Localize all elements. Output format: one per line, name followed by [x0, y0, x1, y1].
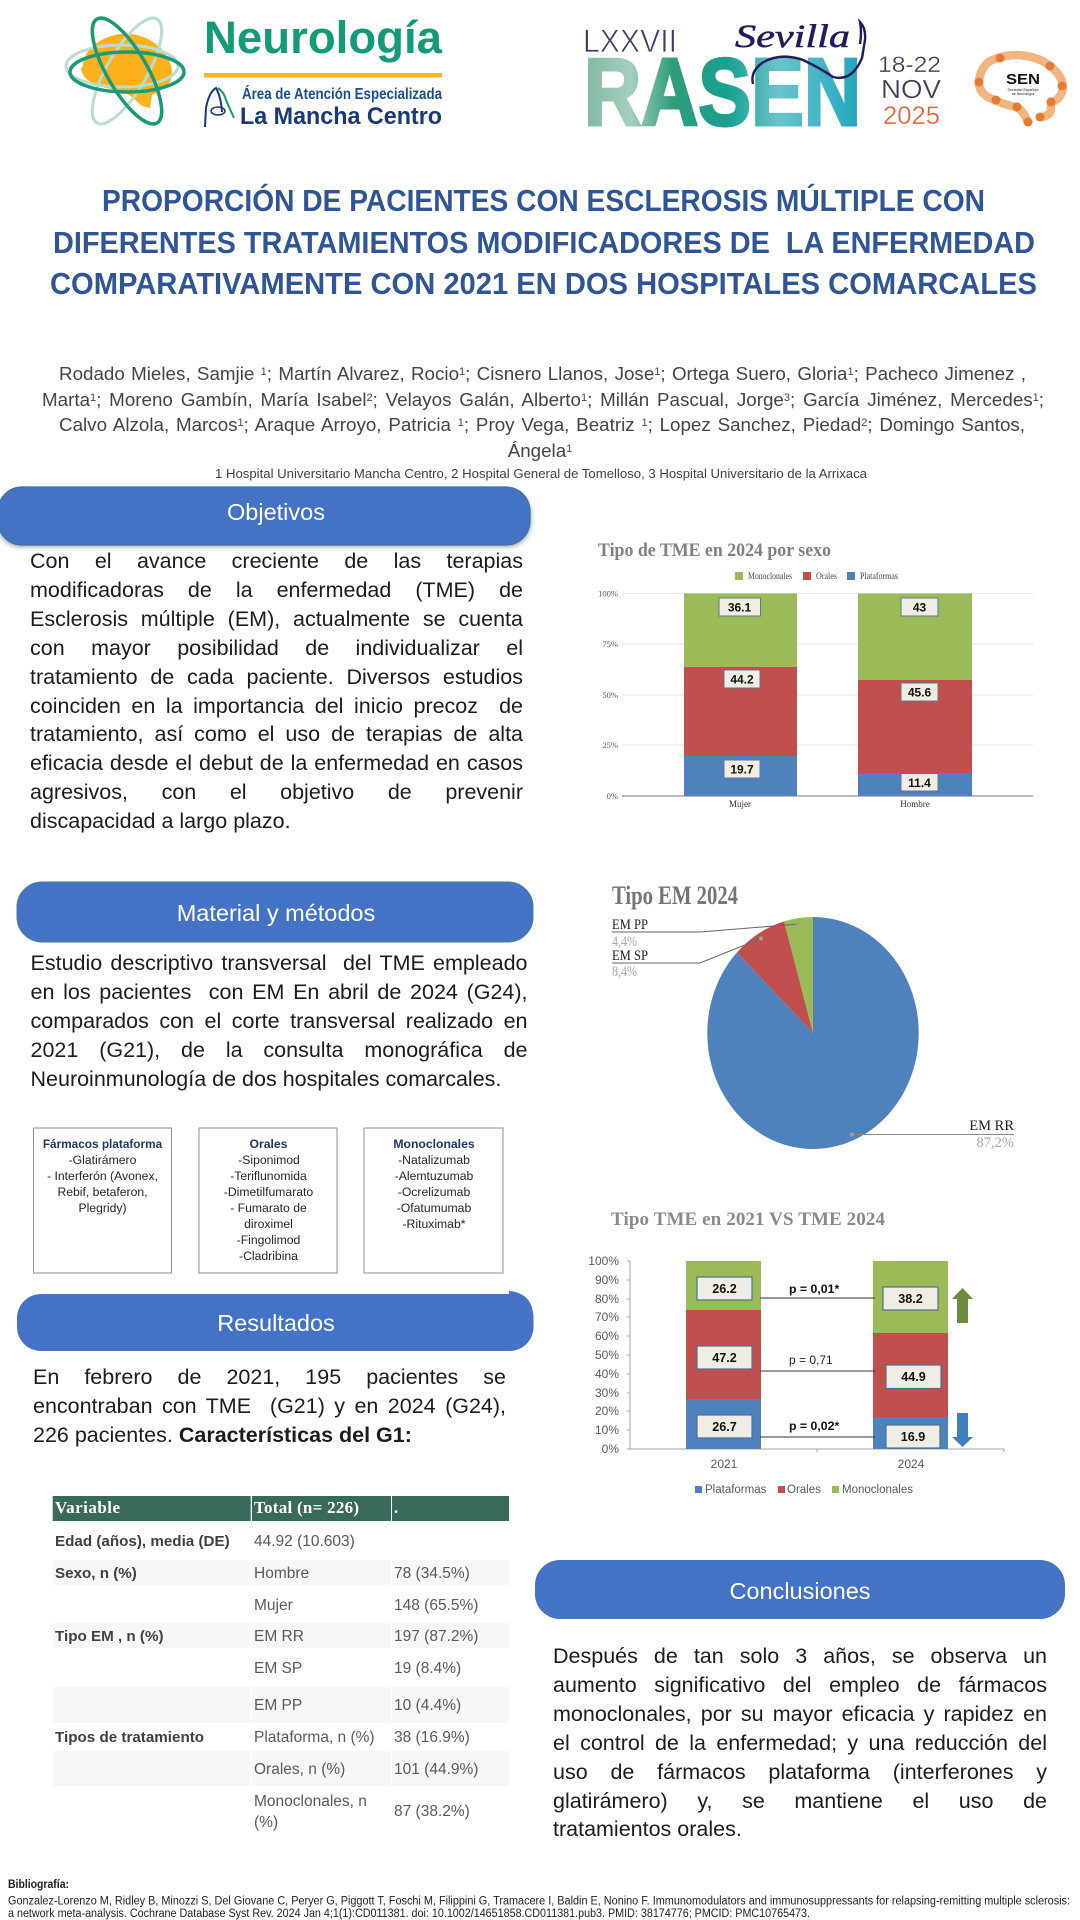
table rows: Tipos de tratamiento: [55, 1729, 204, 1746]
bar: 2021: 2021: [711, 1457, 738, 1471]
comparison lines with p values: [760, 1282, 875, 1437]
bar: 2024: 38.2: [898, 1292, 923, 1306]
table rows: 101 (44.9%): [394, 1761, 478, 1778]
box: Fármacos plataforma: Rebif, betaferon,: [57, 1185, 148, 1199]
bar: 2024: [873, 1261, 948, 1471]
legend: Plataformas: [705, 1484, 767, 1496]
label: EM PP: [612, 917, 800, 950]
icon: brain and atom rings: [66, 9, 184, 133]
text: Material y métodos: [30, 951, 528, 1091]
title: PROPORCIÓN DE PACIENTES CON ESCLEROSIS MÚLTIPLE CON: [102, 182, 985, 218]
box: Fármacos plataforma: Plegridy): [78, 1201, 127, 1215]
box: Monoclonales: -Ofatumumab: [397, 1201, 471, 1215]
bar: 2021: 26.2: [712, 1282, 737, 1296]
bar: Mujer: 19.7: [730, 762, 754, 776]
section header: Material y métodos: Material y métodos: [177, 900, 375, 926]
text: Material y métodos: comparados con el corte transversal realizado en: [30, 1009, 528, 1033]
text: Objetivos: Esclerosis múltiple (EM), actualmente se cuenta: [30, 607, 523, 631]
patient characteristics table: [53, 1496, 509, 1831]
text: Material y métodos: 2021 (G21), de la consulta monográfica de: [30, 1038, 528, 1062]
arrow: up: [952, 1288, 973, 1323]
table rows: (%): [254, 1814, 278, 1831]
box: Orales: [199, 1128, 337, 1273]
box: Fármacos plataforma: - Interferón (Avonex,: [47, 1169, 158, 1183]
table rows: Mujer: [254, 1597, 293, 1614]
arrow: down: [952, 1413, 973, 1447]
logo: LXXVII RASEN Sevilla: [583, 19, 942, 146]
label: EM SP: EM SP: [612, 948, 648, 964]
bar: Hombre: [858, 594, 972, 809]
table rows: 44.92 (10.603): [254, 1533, 355, 1550]
bibliography: [8, 1879, 1070, 1920]
label: EM SP: [612, 936, 763, 980]
bar: Hombre: 45.6: [908, 686, 932, 700]
table rows: Plataforma, n (%): [254, 1729, 375, 1746]
box: Monoclonales: -Natalizumab: [398, 1153, 470, 1167]
bar: Mujer: [684, 594, 797, 809]
axis and gridlines: [598, 588, 1033, 801]
chart title: Tipo TME en 2021 VS TME 2024: [611, 1209, 886, 1230]
authors: Ángela1: [508, 440, 572, 460]
text: Conclusiones: aumento significativo del empleo de fármacos: [553, 1673, 1047, 1697]
label: EM SP: 8,4%: [612, 964, 637, 980]
section header: Resultados: [17, 1291, 534, 1351]
authors: Rodado Mieles, Samjie 1; Martín Alvarez, Rocio1; Cisnero Llanos, Jose1; Ortega Suero, Gloria1; Pacheco Jimenez ,: [59, 363, 1026, 384]
icon: arch: [205, 88, 234, 127]
edition number: LXXVII: [583, 23, 677, 59]
legend: Plataformas: [860, 571, 898, 581]
text: Objetivos: discapacidad a largo plazo.: [30, 809, 291, 833]
bar: Hombre: 43: [913, 600, 926, 614]
hospital name: La Mancha Centro: [240, 103, 442, 130]
month: NOV: [881, 74, 942, 104]
bibliography: a network meta-analysis. Cochrane Database Syst Rev. 2024 Jan 4;1(1):CD011381. doi: 10.1002/14651858.CD011381.pub3. PMID: 38174776; PMCID: PMC10765473.: [8, 1908, 810, 1920]
chart: Tipo de TME en 2024 por sexo: [598, 541, 1033, 809]
label: EM PP: 4,4%: [612, 934, 637, 950]
table rows: Monoclonales, n: [254, 1793, 367, 1810]
logo: SEN: SEN: [1006, 71, 1040, 88]
axes: 80%: [595, 1292, 619, 1306]
text: Objetivos: agresivos, con el objetivo de prevenir: [30, 780, 523, 804]
axis and gridlines: 50%: [602, 690, 618, 700]
axes: 90%: [595, 1273, 619, 1287]
logo wordmark: Neurología: [204, 12, 443, 63]
logo: Neurología: [66, 9, 443, 133]
table header: .: [394, 1498, 398, 1517]
legend: Monoclonales: [748, 571, 792, 581]
title: DIFERENTES TRATAMIENTOS MODIFICADORES DE LA ENFERMEDAD: [53, 225, 1035, 260]
text: Resultados: [33, 1365, 506, 1447]
axis and gridlines: 75%: [602, 639, 618, 649]
bar: 2024: 2024: [898, 1457, 925, 1471]
box: Monoclonales: [364, 1128, 503, 1273]
chart title: Tipo de TME en 2024 por sexo: [598, 541, 831, 561]
text: Objetivos: con mayor posibilidad de individualizar el: [30, 636, 523, 660]
box: Monoclonales: -Ocrelizumab: [398, 1185, 470, 1199]
table rows: Orales, n (%): [254, 1761, 345, 1778]
text: Conclusiones: glatirámero) y, se mantiene el uso de: [553, 1789, 1047, 1813]
legend: Orales: [787, 1484, 821, 1496]
axes: 70%: [595, 1310, 619, 1324]
text: Conclusiones: [553, 1644, 1047, 1841]
table rows: 78 (34.5%): [394, 1565, 470, 1582]
RASEN wordmark: RASEN: [584, 39, 861, 146]
table rows: 10 (4.4%): [394, 1697, 461, 1714]
authors: Marta1; Moreno Gambín, María Isabel2; Velayos Galán, Alberto1; Millán Pascual, Jorge3; García Jiménez, Mercedes1;: [42, 388, 1044, 410]
section header: Conclusiones: Conclusiones: [729, 1578, 871, 1604]
text: Resultados: 226 pacientes. Características del G1:: [33, 1423, 412, 1447]
text: Material y métodos: Neuroinmunología de dos hospitales comarcales.: [30, 1067, 501, 1091]
box: Orales: -Siponimod: [238, 1153, 300, 1167]
legend: Monoclonales: [842, 1484, 913, 1496]
box: Orales: -Fingolimod: [237, 1233, 300, 1247]
bar: Mujer: 44.2: [730, 672, 754, 686]
chart: Tipo TME en 2021 VS TME 2024: [588, 1209, 1004, 1496]
legend: Orales: [816, 571, 837, 581]
text: Objetivos: eficacia desde el debut de la enfermedad en casos: [30, 751, 523, 775]
box: Fármacos plataforma: -Glatirámero: [69, 1153, 137, 1167]
hospital area name: Área de Atención Especializada: [242, 86, 442, 103]
box: Orales: - Fumarato de: [230, 1201, 307, 1215]
drug classes boxes: [34, 1128, 503, 1273]
table rows: Hombre: [254, 1565, 309, 1582]
text: Conclusiones: tratamientos orales.: [553, 1817, 742, 1841]
affiliations: 1 Hospital Universitario Mancha Centro, 2 Hospital General de Tomelloso, 3 Hospital Universitario de la Arrixaca: [215, 466, 868, 481]
box: Orales: -Cladribina: [239, 1249, 298, 1263]
table bands: [53, 1560, 509, 1786]
bar: 2021: 26.7: [712, 1420, 737, 1434]
table rows: [55, 1533, 478, 1831]
text: Material y métodos: Estudio descriptivo transversal del TME empleado: [30, 951, 528, 975]
swoosh: [752, 22, 865, 84]
bar: Hombre: 11.4: [908, 776, 931, 790]
table rows: Tipo EM , n (%): [55, 1628, 164, 1645]
table rows: EM PP: [254, 1697, 302, 1714]
text: Resultados: En febrero de 2021, 195 pacientes se: [33, 1365, 506, 1389]
text: Objetivos: tratamiento de cada paciente. Diversos estudios: [30, 665, 523, 689]
axes: 60%: [595, 1329, 619, 1343]
chart: Tipo EM 2024 pie: [612, 881, 1014, 1151]
table rows: EM SP: [254, 1660, 302, 1677]
box: Orales: diroximel: [244, 1217, 293, 1231]
authors: [42, 363, 1044, 461]
axes: 40%: [595, 1367, 619, 1381]
text: Material y métodos: en los pacientes con EM En abril de 2024 (G24),: [30, 980, 528, 1004]
text: Objetivos: [30, 549, 523, 833]
comparison lines with p values: p = 0,01*: [789, 1282, 839, 1296]
bar: 2021: 47.2: [712, 1351, 737, 1365]
axis and gridlines: 25%: [602, 740, 618, 750]
Sevilla script: Sevilla: [735, 19, 850, 55]
table rows: 148 (65.5%): [394, 1597, 478, 1614]
box: Fármacos plataforma: [34, 1128, 172, 1273]
dates: 18-22: [878, 52, 941, 77]
box: Monoclonales: -Alemtuzumab: [395, 1169, 474, 1183]
axes: 10%: [595, 1423, 619, 1437]
axis and gridlines: 0%: [607, 791, 618, 801]
comparison lines with p values: p = 0,02*: [789, 1419, 839, 1433]
year: 2025: [883, 102, 940, 130]
bar: 2024: 44.9: [901, 1370, 926, 1384]
table header: [53, 1496, 509, 1521]
axes: [588, 1254, 1004, 1456]
logo: SEN: [974, 54, 1066, 126]
text: Conclusiones: uso de fármacos plataforma (interferones y: [553, 1760, 1047, 1784]
title: COMPARATIVAMENTE CON 2021 EN DOS HOSPITALES COMARCALES: [50, 266, 1037, 301]
title: [50, 182, 1037, 301]
table rows: 87 (38.2%): [394, 1803, 470, 1820]
text: Objetivos: coinciden en la importancia del inicio precoz de: [30, 694, 523, 718]
text: Objetivos: Con el avance creciente de las terapias: [30, 549, 523, 573]
chart title: Tipo EM 2024: [612, 881, 738, 910]
text: Objetivos: tratamiento, así como el uso de terapias de alta: [30, 722, 523, 746]
table rows: EM RR: [254, 1628, 304, 1645]
table rows: Sexo, n (%): [55, 1565, 137, 1582]
bar: 2021: [686, 1261, 761, 1471]
bar: 2024: 16.9: [901, 1430, 925, 1444]
table rows: Edad (años), media (DE): [55, 1533, 230, 1550]
label: EM PP: EM PP: [612, 917, 648, 933]
comparison lines with p values: p = 0,71: [789, 1353, 833, 1367]
text: Resultados: encontraban con TME (G21) y en 2024 (G24),: [33, 1394, 506, 1418]
legend: [695, 1484, 913, 1496]
axes: 0%: [602, 1442, 619, 1456]
bar: Hombre: Hombre: [900, 799, 930, 809]
bar: Mujer: Mujer: [729, 799, 751, 809]
table rows: 19 (8.4%): [394, 1660, 461, 1677]
label: EM RR: 87,2%: [977, 1135, 1014, 1151]
section header: Resultados: Resultados: [217, 1310, 335, 1336]
text: Objetivos: modificadoras de la enfermedad (TME) de: [30, 578, 523, 602]
logo: SEN: Sociedad Española: [1008, 88, 1038, 92]
label: EM RR: EM RR: [969, 1118, 1014, 1134]
table header: Total (n= 226): [254, 1498, 359, 1517]
box: Fármacos plataforma: Fármacos plataforma: [43, 1137, 163, 1151]
section header: Objetivos: Objetivos: [227, 499, 325, 525]
legend: [735, 571, 898, 581]
pie slices: [707, 917, 919, 1149]
text: Conclusiones: monoclonales, por su mayor eficacia y rapidez en: [553, 1702, 1047, 1726]
authors: Calvo Alzola, Marcos1; Araque Arroyo, Patricia 1; Proy Vega, Beatriz 1; Lopez Sanchez, Piedad2; Domingo Santos,: [59, 414, 1025, 435]
yellow rule: [204, 73, 442, 78]
axes: 100%: [588, 1254, 619, 1268]
logo: SEN: de Neurología: [1012, 92, 1034, 96]
axis and gridlines: 100%: [598, 588, 618, 598]
bar: Mujer: 36.1: [728, 600, 752, 614]
text: Conclusiones: el control de la enfermedad; y una reducción del: [553, 1731, 1047, 1755]
box: Monoclonales: -Rituximab*: [402, 1217, 466, 1231]
bibliography: Bibliografía:: [8, 1879, 69, 1891]
label: EM RR: [850, 1118, 1014, 1151]
box: Orales: Orales: [250, 1137, 288, 1151]
box: Orales: -Dimetilfumarato: [224, 1185, 313, 1199]
axes: 50%: [595, 1348, 619, 1362]
table header: Variable: [55, 1498, 120, 1517]
box: Orales: -Teriflunomida: [230, 1169, 307, 1183]
section header: Objetivos: [0, 487, 531, 547]
axes: 20%: [595, 1404, 619, 1418]
table rows: 38 (16.9%): [394, 1729, 470, 1746]
table rows: 197 (87.2%): [394, 1628, 478, 1645]
section header: Material y métodos: [17, 882, 533, 942]
axes: 30%: [595, 1386, 619, 1400]
text: Conclusiones: Después de tan solo 3 años, se observa un: [553, 1644, 1047, 1668]
section header: Conclusiones: [535, 1560, 1065, 1619]
box: Monoclonales: Monoclonales: [393, 1137, 475, 1151]
